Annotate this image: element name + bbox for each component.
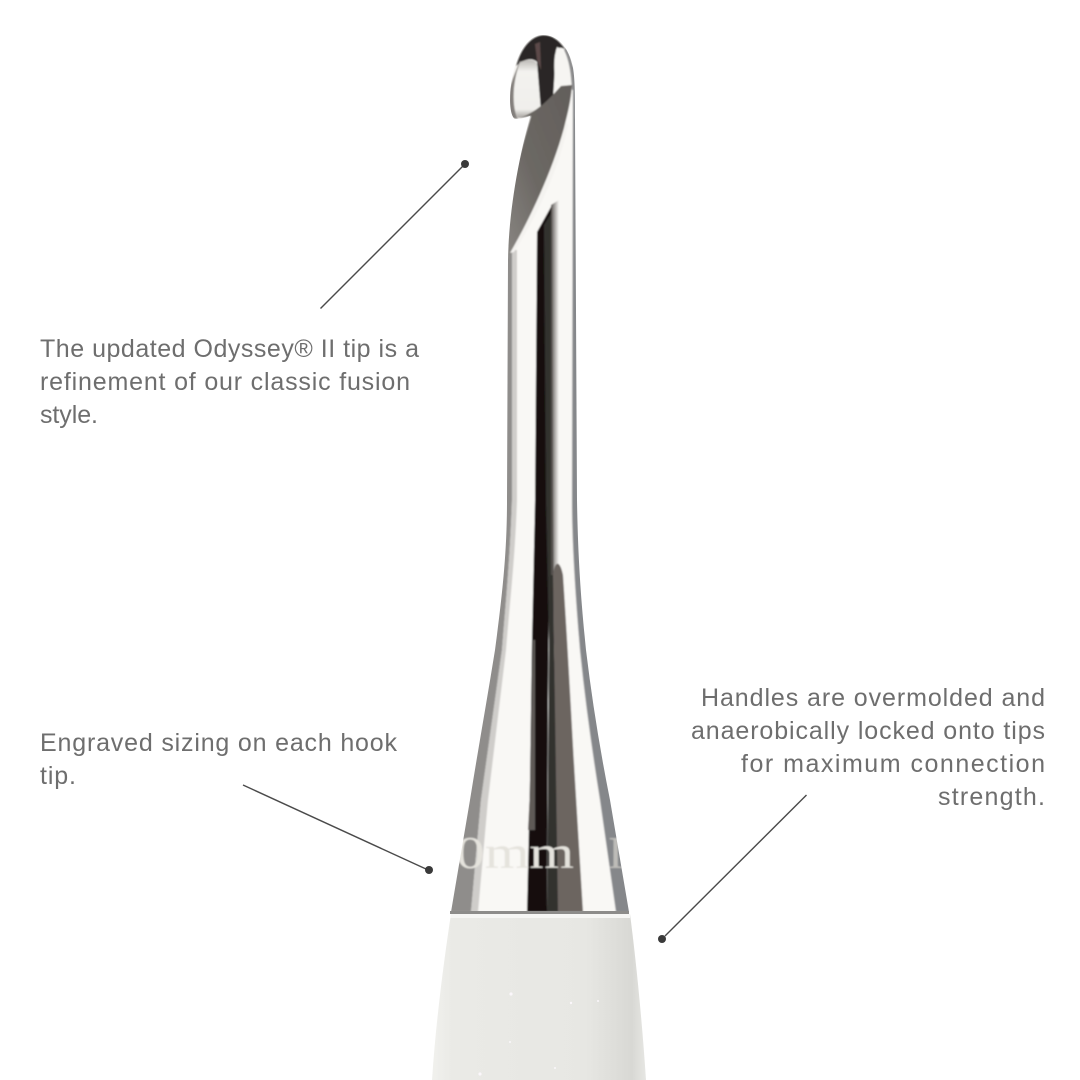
callout text: anaerobically locked onto tips [691, 717, 1045, 745]
leader line with dot [658, 795, 806, 943]
brown reflection [553, 564, 583, 912]
head right edge [564, 48, 575, 90]
leader line with dot [320, 160, 469, 308]
engraved size text: 0mm [456, 827, 574, 878]
callout text: tip. [40, 762, 76, 790]
centre secondary band [544, 212, 560, 912]
callout text: Engraved sizing on each hook [40, 729, 398, 757]
callout text: style. [40, 401, 98, 429]
callout: handles [658, 684, 1045, 943]
left edge reflection [451, 252, 513, 911]
grey fade beside band [551, 200, 559, 575]
right edge reflection [572, 60, 635, 912]
throat highlight [510, 236, 519, 254]
callout text: for maximum connection [741, 750, 1045, 778]
callout text [40, 729, 398, 790]
callout: Odyssey II tip [40, 160, 469, 429]
hook head dark cap [516, 35, 566, 112]
callout text: refinement of our classic fusion [40, 368, 410, 396]
callout text: Handles are overmolded and [701, 684, 1045, 712]
callout text [691, 684, 1045, 811]
engraved partial letter: I [608, 827, 623, 878]
leader line with dot [243, 785, 433, 874]
centre dark band [527, 205, 552, 912]
metal hook tip [451, 35, 629, 911]
hook lobe [514, 60, 540, 118]
metal collar [450, 911, 629, 914]
lobe shaded edge [509, 60, 520, 119]
callout text: The updated Odyssey® II tip is a [40, 335, 419, 363]
handle glitter [478, 992, 599, 1076]
callout text: strength. [938, 783, 1045, 811]
crochet hook illustration [425, 30, 655, 1080]
callout: engraved sizing [40, 729, 433, 874]
callout text [40, 335, 419, 429]
left textured streak [528, 640, 535, 830]
white handle [425, 914, 655, 1080]
head right highlight [553, 46, 560, 74]
throat cut [505, 85, 572, 258]
